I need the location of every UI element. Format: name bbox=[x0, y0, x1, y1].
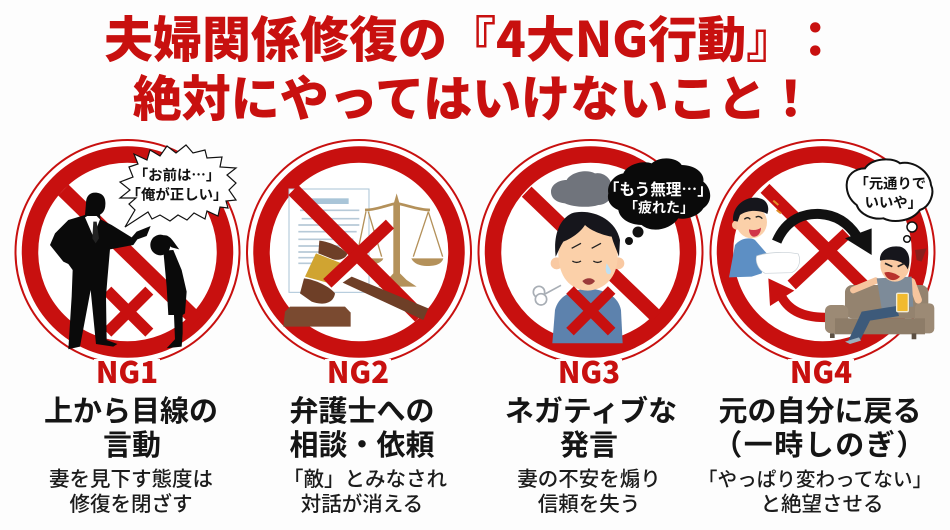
heading line 2: 言動 bbox=[103, 422, 161, 464]
speech bubble: 「お前は…」「俺が正しい」: 「お前は…」 bbox=[134, 164, 220, 185]
panel: NG1 bbox=[16, 140, 240, 517]
icon: prohibition sign with two men and cycle arrows bbox=[710, 140, 934, 364]
speech bubble: 「お前は…」「俺が正しい」 bbox=[120, 145, 236, 227]
thought bubble: 「元通りでいいや」: いいや」 bbox=[865, 191, 922, 212]
description: 妻の不安を煽り bbox=[517, 462, 661, 492]
panel: NG2 bbox=[247, 140, 471, 517]
thought bubble: 「元通りでいいや」 bbox=[847, 159, 932, 242]
label: NG4: NG4 bbox=[790, 350, 852, 392]
description: 「敵」とみなされ bbox=[283, 462, 447, 492]
heading: 弁護士への bbox=[289, 388, 435, 430]
heading: ネガティブな bbox=[505, 388, 677, 430]
description: 妻を見下す態度は bbox=[49, 462, 213, 492]
title: 夫婦関係修復の『4大NG行動』 ： bbox=[104, 1, 840, 72]
label: NG2: NG2 bbox=[327, 350, 389, 392]
heading line 2: 発言 bbox=[560, 422, 618, 464]
title bbox=[104, 1, 840, 131]
thought bubble: 「元通りでいいや」: 「元通りで bbox=[854, 172, 926, 193]
heading line 2: （一時しのぎ） bbox=[713, 422, 927, 464]
title: 絶対にやってはいけないこと！ bbox=[133, 60, 815, 131]
heading: 上から目線の bbox=[44, 388, 218, 430]
description: 「やっぱり変わってない」 bbox=[698, 463, 932, 492]
thought bubble: 「もう無理…」「疲れた」 bbox=[604, 158, 713, 245]
heading line 2: 相談・依頼 bbox=[289, 422, 435, 464]
icon: prohibition sign with tired man bbox=[478, 140, 702, 364]
label: NG1: NG1 bbox=[96, 350, 158, 392]
icon: prohibition sign with silhouettes bbox=[16, 140, 240, 364]
description line 2: 対話が消える bbox=[301, 487, 423, 517]
heading: 元の自分に戻る bbox=[718, 388, 922, 430]
label: NG3: NG3 bbox=[558, 350, 620, 392]
description line 2: と絶望させる bbox=[760, 487, 884, 517]
thought bubble: 「もう無理…」「疲れた」: 「疲れた」 bbox=[624, 198, 694, 218]
panel: NG4 bbox=[698, 140, 934, 517]
icon: prohibition sign with gavel and scales bbox=[247, 140, 471, 364]
description line 2: 修復を閉ざす bbox=[70, 487, 192, 517]
speech bubble: 「お前は…」「俺が正しい」: 「俺が正しい」 bbox=[127, 183, 227, 204]
thought bubble: 「もう無理…」「疲れた」: 「もう無理…」 bbox=[604, 177, 713, 200]
description line 2: 信頼を失う bbox=[538, 487, 640, 517]
panel: NG3 bbox=[478, 140, 713, 517]
